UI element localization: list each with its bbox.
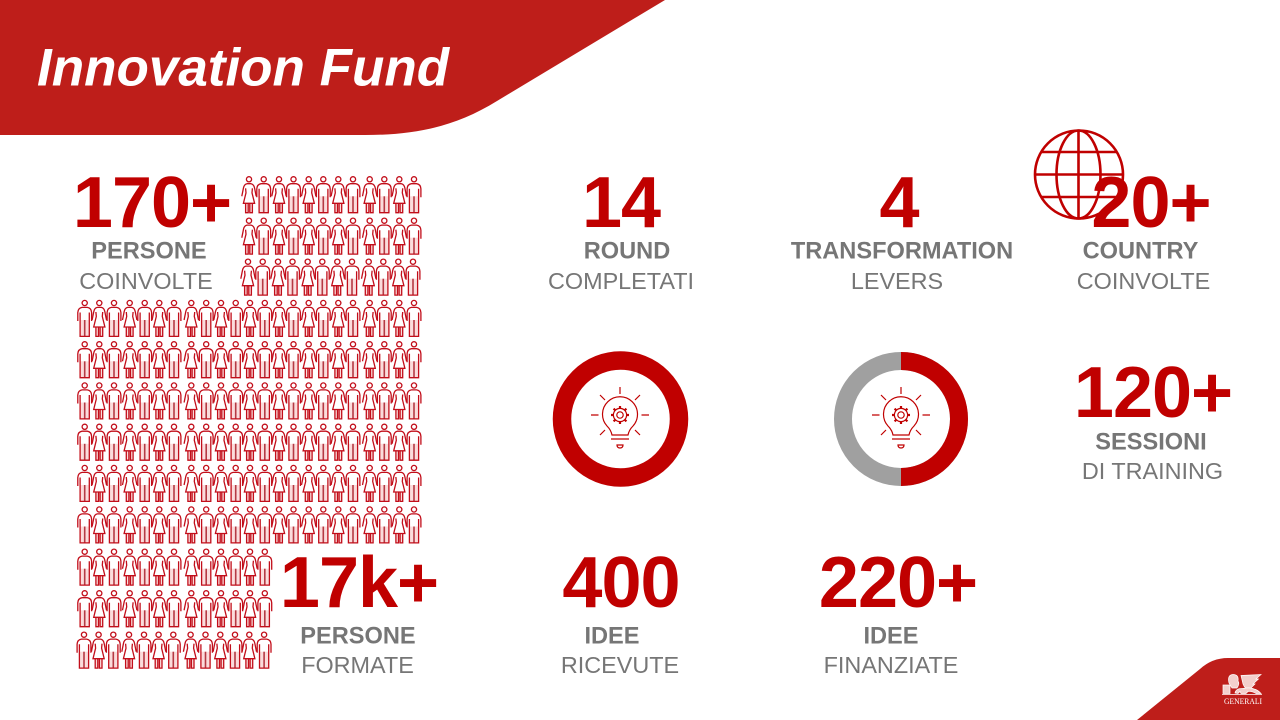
icon: light bulb with gear (872, 387, 930, 448)
stat: 14 round completati: ROUND (584, 239, 670, 265)
stat: 17k+ persone formate: 17k+ (280, 543, 438, 623)
icon: globe (1035, 130, 1123, 218)
stat: 20+ country coinvolte: COINVOLTE (1077, 268, 1210, 294)
stat: 170+ persone coinvolte (73, 163, 231, 294)
stat: 17k+ persone formate (280, 543, 438, 678)
stat: 120+ sessioni di training: SESSIONI (1095, 430, 1207, 456)
stat: 4 transformation levers: 4 (879, 163, 919, 243)
icon: light bulb with gear (591, 387, 649, 448)
stat: 170+ persone coinvolte: 170+ (73, 163, 231, 243)
donut chart: 220+ ideas funded (843, 361, 959, 477)
stat: 220+ idee finanziate: IDEE (863, 624, 919, 650)
stat: 14 round completati: 14 (582, 163, 661, 243)
stat: 220+ idee finanziate: 220+ (819, 543, 977, 623)
stat: 120+ sessioni di training (1074, 353, 1232, 484)
title: Innovation Fund (37, 38, 451, 98)
icon: winged lion (1222, 674, 1262, 694)
stat: 20+ country coinvolte: 20+ (1091, 163, 1211, 243)
footer corner with Generali logo (1137, 658, 1280, 720)
stat: 170+ persone coinvolte: COINVOLTE (79, 268, 213, 294)
stat: 4 transformation levers: LEVERS (851, 268, 943, 294)
stat: 20+ country coinvolte: COUNTRY (1083, 239, 1199, 265)
stat: 120+ sessioni di training: 120+ (1074, 353, 1232, 433)
stat: 220+ idee finanziate: FINANZIATE (824, 652, 958, 678)
stat: 400 idee ricevute (561, 543, 680, 678)
stat: 400 idee ricevute: RICEVUTE (561, 652, 679, 678)
stat: 17k+ persone formate: FORMATE (301, 652, 414, 678)
logo wordmark: GENERALI (1224, 697, 1262, 706)
header banner (0, 0, 665, 135)
stat: 17k+ persone formate: PERSONE (300, 624, 416, 650)
stat: 4 transformation levers: TRANSFORMATION (791, 239, 1013, 265)
stat: 20+ country coinvolte (1077, 163, 1211, 294)
pictogram: people grid (77, 177, 421, 668)
stat: 400 idee ricevute: 400 (562, 543, 680, 623)
stat: 4 transformation levers (791, 163, 1013, 294)
stat: 220+ idee finanziate (819, 543, 977, 678)
stat: 120+ sessioni di training: DI TRAINING (1082, 458, 1223, 484)
donut chart: 400 ideas received (562, 360, 679, 478)
stat: 14 round completati: COMPLETATI (548, 268, 694, 294)
stat: 14 round completati (548, 163, 694, 294)
stat: 400 idee ricevute: IDEE (584, 624, 640, 650)
stat: 170+ persone coinvolte: PERSONE (91, 239, 207, 265)
